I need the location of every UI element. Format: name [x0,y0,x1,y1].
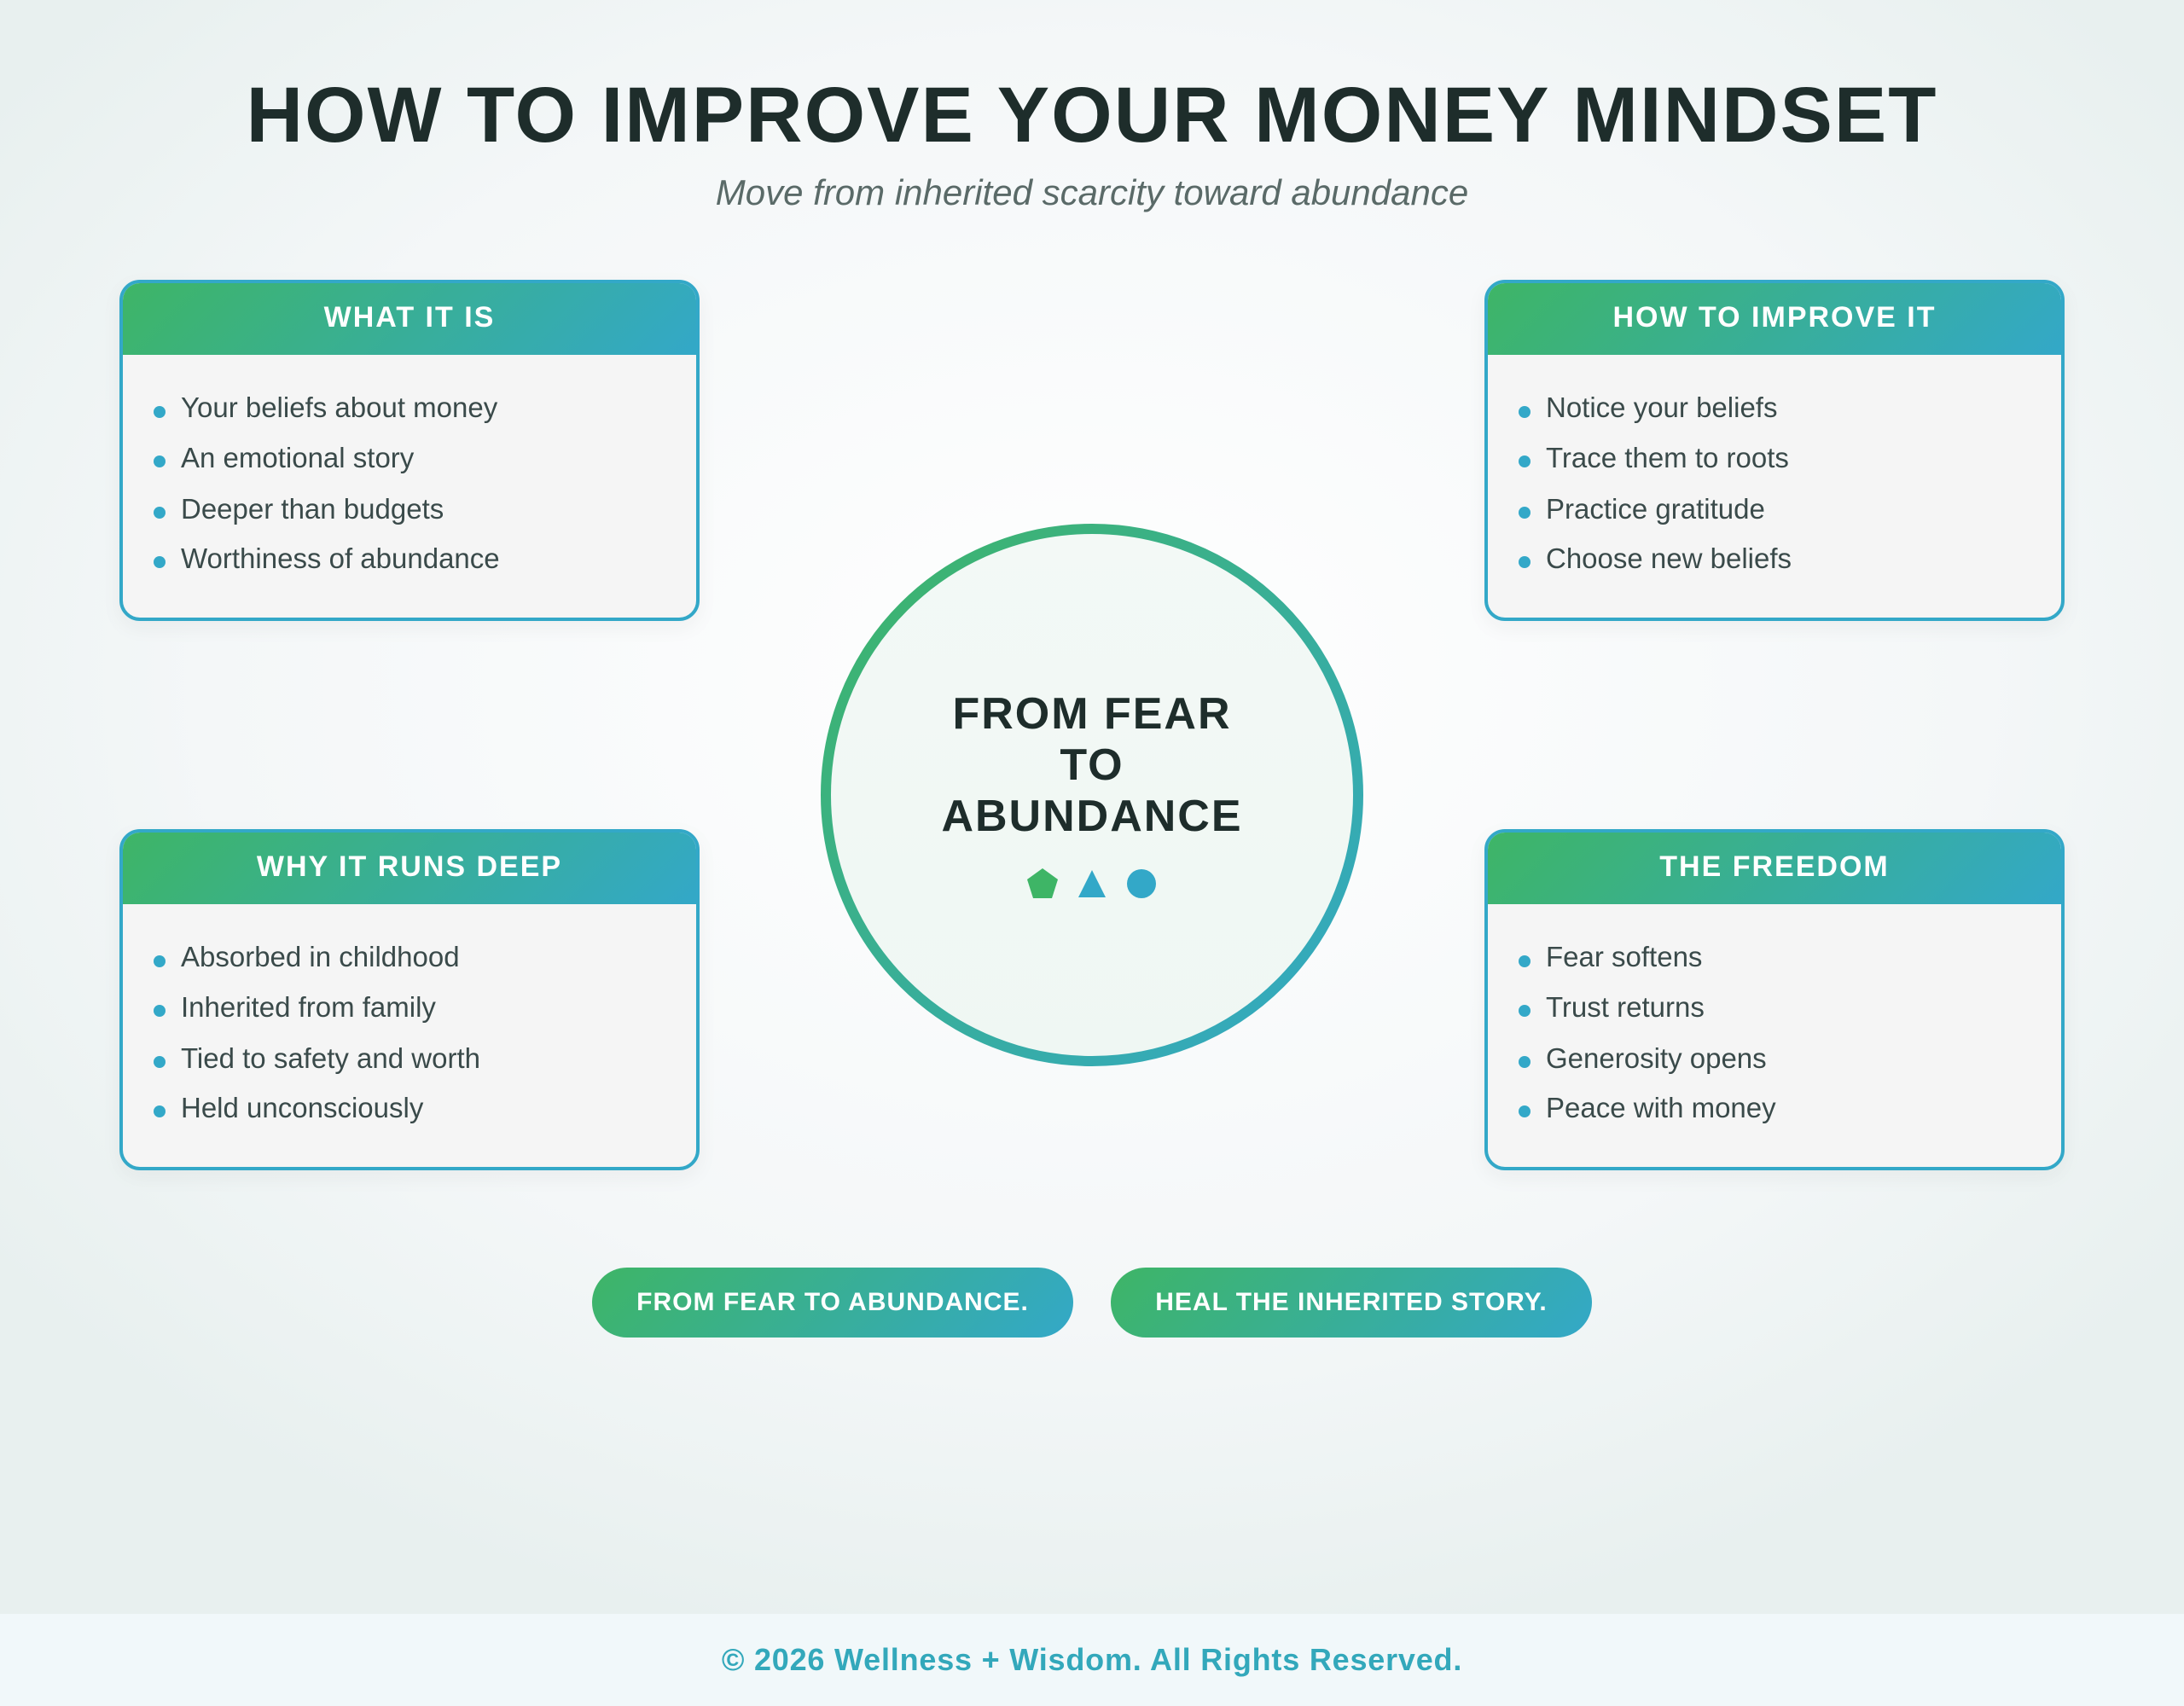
circle heading: ABUNDANCE [941,792,1243,841]
panel: how to improve it [1484,280,2065,621]
panel: why it runs deep: Inherited from family [181,991,436,1023]
panel: how to improve it: Choose new beliefs [1546,543,1792,574]
panel: why it runs deep: Held unconsciously [181,1092,423,1123]
panel: the freedom: Fear softens [1546,941,1702,972]
icon: pentagon [1027,868,1058,898]
panel: what it is: Deeper than budgets [181,493,444,525]
callout pill: heal the inherited story [1111,1268,1592,1338]
panel: how to improve it: Practice gratitude [1546,493,1765,525]
panel: why it runs deep: Absorbed in childhood [181,941,460,972]
panel: what it is: Your beliefs about money [181,392,497,423]
panel: the freedom: Trust returns [1546,991,1705,1023]
callout pill: from fear to abundance [592,1268,1073,1338]
panel: the freedom [1484,829,2065,1170]
circle heading: TO [1060,740,1124,790]
panel heading: how to improve it [1488,283,2061,355]
panel heading: what it is: WHAT IT IS [324,301,495,334]
central circle hub [821,524,1363,1066]
panel: how to improve it: Notice your beliefs [1546,392,1777,423]
callout pill: from fear to abundance: FROM FEAR TO ABUNDANCE. [636,1288,1029,1316]
title: HOW TO IMPROVE YOUR MONEY MINDSET [247,72,1937,159]
panel heading: the freedom [1488,833,2061,904]
subtitle: Move from inherited scarcity toward abundance [716,172,1468,212]
panel: how to improve it: Trace them to roots [1546,442,1789,473]
circle heading: FROM FEAR [952,689,1232,739]
panel: what it is: An emotional story [181,442,414,473]
callout pill: heal the inherited story: HEAL THE INHERITED STORY. [1155,1288,1548,1316]
panel heading: why it runs deep: WHY IT RUNS DEEP [257,850,562,883]
panel heading: the freedom: THE FREEDOM [1659,850,1890,883]
icon: circle [1127,869,1156,898]
panel: why it runs deep [119,829,700,1170]
panel: what it is: Worthiness of abundance [181,543,500,574]
panel heading: what it is [123,283,696,355]
panel heading: how to improve it: HOW TO IMPROVE IT [1612,301,1937,334]
panel: the freedom: Peace with money [1546,1092,1776,1123]
circle heading [941,689,1243,841]
panel: the freedom: Generosity opens [1546,1042,1767,1074]
footer [0,1614,2184,1706]
panel: why it runs deep: Tied to safety and worth [181,1042,480,1074]
panel heading: why it runs deep [123,833,696,904]
icon: triangle [1078,870,1106,897]
footer: © 2026 Wellness + Wisdom. All Rights Reserved. [722,1642,1462,1677]
panel: what it is [119,280,700,621]
